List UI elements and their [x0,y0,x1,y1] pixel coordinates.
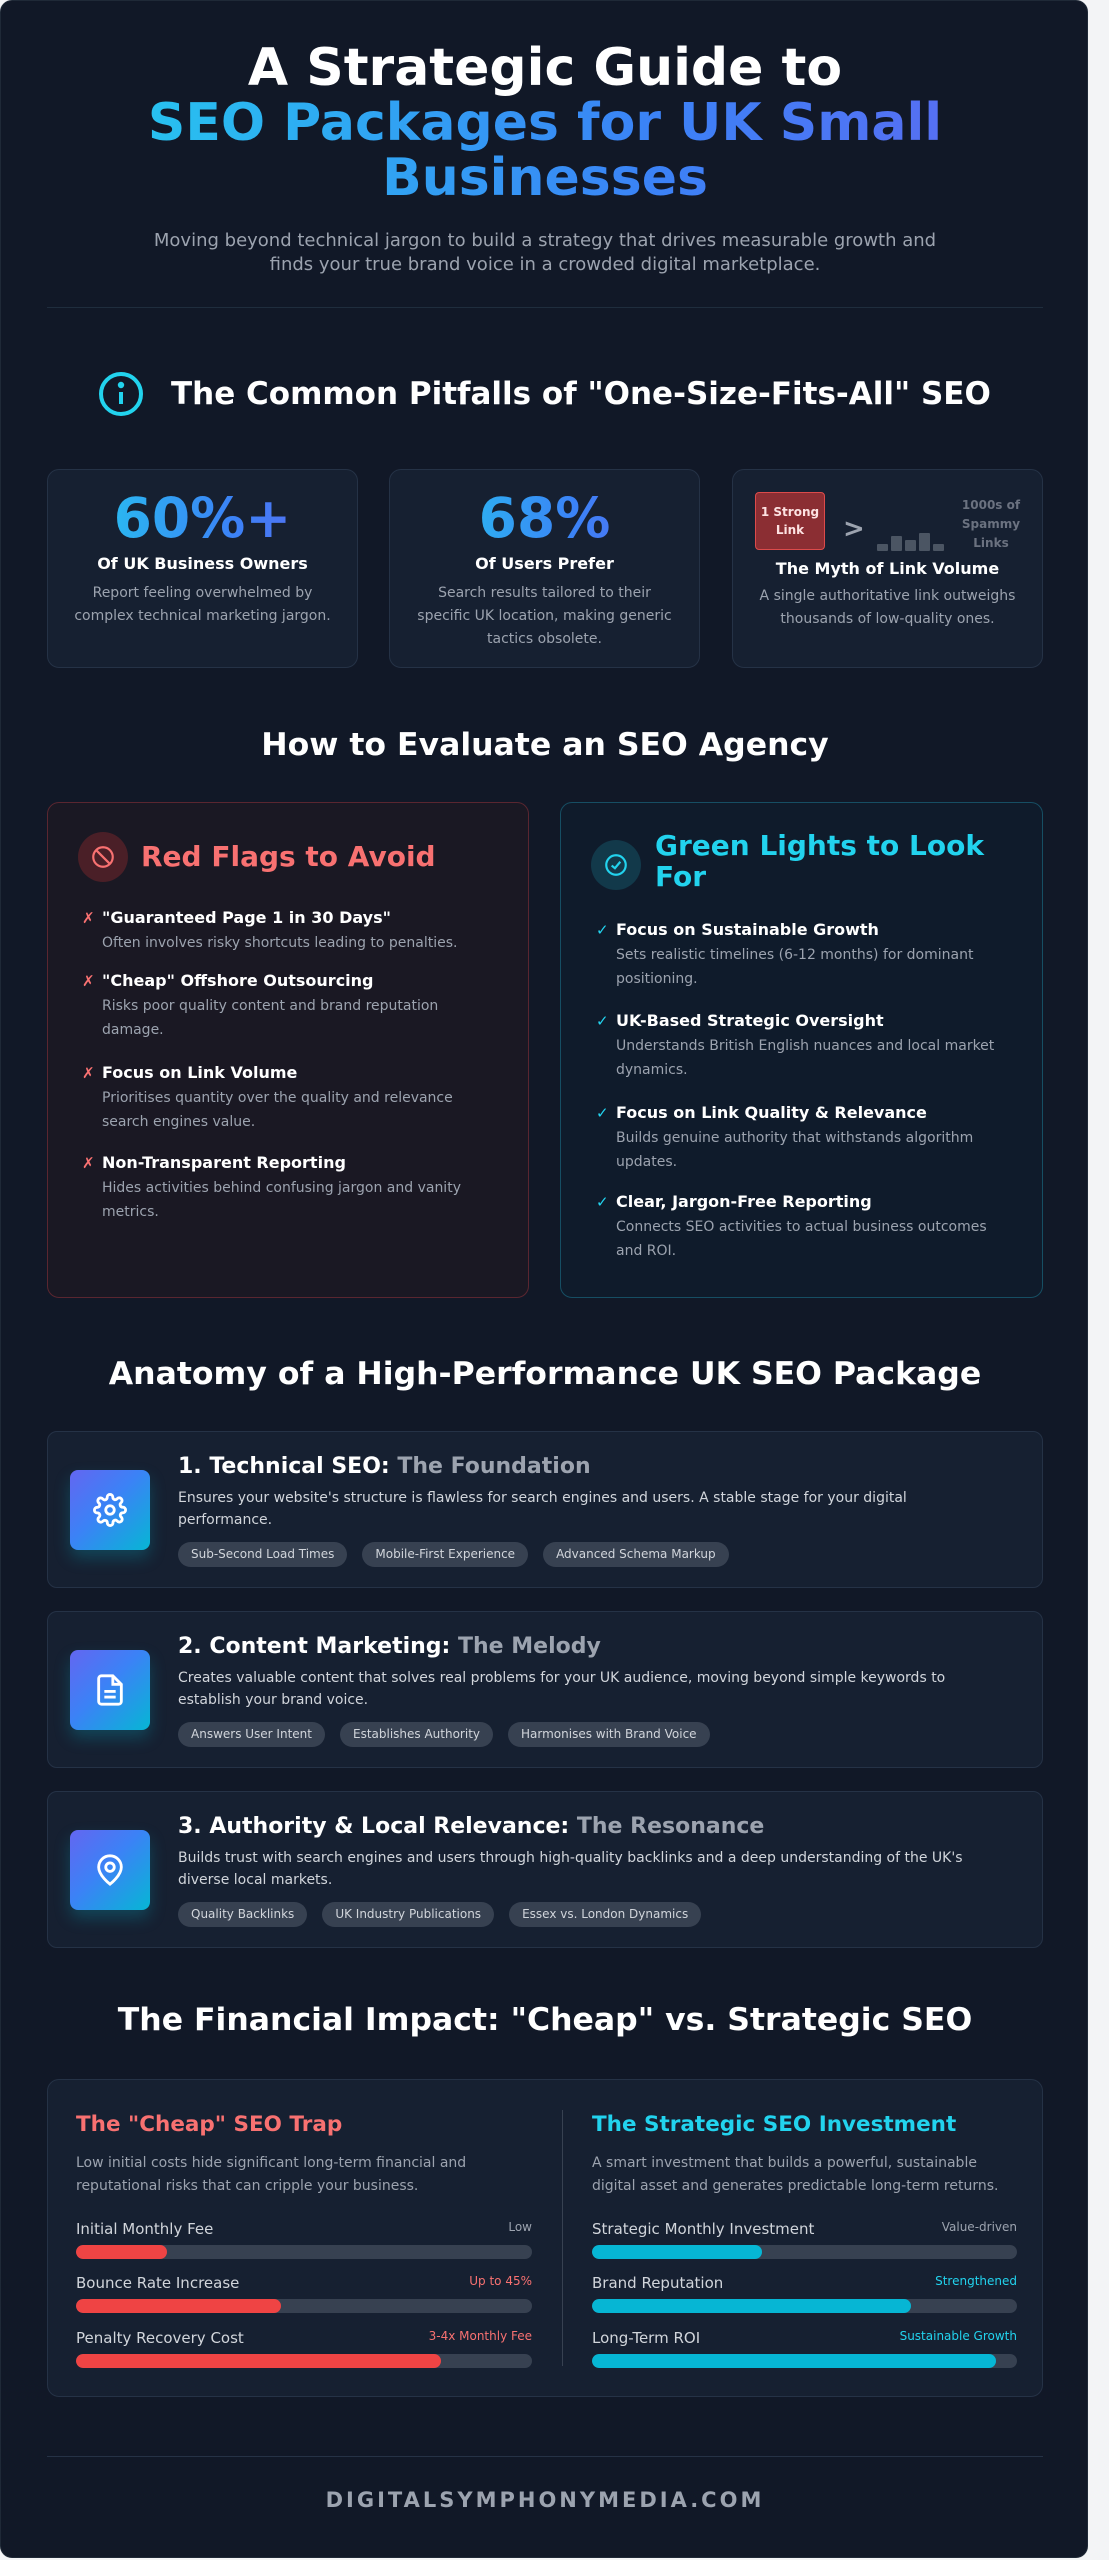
title: SEO Packages for UK Small [148,93,942,153]
stat card 3: myth of link volume: > [843,514,865,544]
package 2: content marketing: Harmonises with Brand Voice [521,1727,697,1741]
package 3: authority [47,1791,1043,1948]
heading: anatomy: Anatomy of a High-Performance UK SEO Package [109,1356,981,1392]
package 1: technical SEO: Advanced Schema Markup [556,1547,716,1561]
subtitle: Moving beyond technical jargon to build a strategy that drives measurable growth and finds your true brand voice in a crowded digital marketplace. [154,230,936,275]
panel: red flags [47,802,529,1298]
package 3: authority: UK Industry Publications [335,1907,481,1921]
package 2: content marketing: Establishes Authority [353,1727,480,1741]
strong link box [755,492,825,550]
icon: info [99,372,143,416]
column: cheap trap: Bounce Rate Increase [76,2274,239,2292]
panel: red flags: ✗ [82,1064,95,1082]
column: strategic investment: Strengthened [935,2274,1017,2288]
strong link box: Link [776,523,804,537]
package 2: content marketing: Creates valuable content that solves real problems for your UK audience, moving beyond simple keywords to establish your brand voice. [178,1670,945,1708]
column: strategic investment [592,2112,1017,2368]
spammy bars [877,533,944,551]
heading: evaluate: How to Evaluate an SEO Agency [261,727,829,763]
title: A Strategic Guide to [248,38,842,98]
panel: red flags: Focus on Link Volume [102,1063,297,1082]
icon: check circle [591,840,641,890]
panel: red flags: ✗ [82,1154,95,1172]
panel: green lights: Builds genuine authority that withstands algorithm updates. [616,1130,973,1170]
panel: green lights: ✓ [596,1193,609,1211]
icon: gear [70,1470,150,1550]
panel: green lights: Sets realistic timelines (6-12 months) for dominant positioning. [616,947,973,987]
stat card 2 [389,469,700,668]
stat card 1 [47,469,358,668]
column: cheap trap: Up to 45% [469,2274,532,2288]
panel: green lights: Connects SEO activities to actual business outcomes and ROI. [616,1219,987,1259]
stat card 3: myth of link volume: Spammy [962,517,1020,531]
column: cheap trap: 3-4x Monthly Fee [429,2329,532,2343]
strong link box: 1 Strong [761,505,819,519]
stat card 3: myth of link volume: The Myth of Link Volume [776,559,999,578]
package 2: content marketing: 2. Content Marketing: The Melody [178,1634,601,1659]
column: strategic investment: Long-Term ROI [592,2329,700,2347]
icon: ban [78,832,128,882]
package 1: technical SEO: 1. Technical SEO: The Foundation [178,1454,591,1479]
heading: pitfalls: The Common Pitfalls of "One-Size-Fits-All" SEO [171,376,991,412]
panel: red flags: Non-Transparent Reporting [102,1153,346,1172]
stat card 3: myth of link volume [732,469,1043,668]
icon: location pin [70,1830,150,1910]
package 3: authority: 3. Authority & Local Relevance: The Resonance [178,1814,764,1839]
stat card 2: Of Users Prefer [475,554,614,573]
panel: financial comparison [47,2079,1043,2397]
column: strategic investment: Brand Reputation [592,2274,723,2292]
footer: DIGITALSYMPHONYMEDIA.COM [326,2488,764,2512]
panel: green lights: Focus on Sustainable Growth [616,920,879,939]
column: strategic investment: Strategic Monthly Investment [592,2220,814,2238]
column: cheap trap [76,2112,532,2368]
panel: red flags: Red Flags to Avoid [141,840,436,873]
column: strategic investment: Sustainable Growth [900,2329,1017,2343]
column: cheap trap: Initial Monthly Fee [76,2220,213,2238]
column: cheap trap: Penalty Recovery Cost [76,2329,244,2347]
panel: green lights: Focus on Link Quality & Relevance [616,1103,927,1122]
package 3: authority: Quality Backlinks [191,1907,294,1921]
column: cheap trap: The "Cheap" SEO Trap [76,2112,342,2137]
stat card 1: Of UK Business Owners [97,554,308,573]
package 1: technical SEO: Mobile-First Experience [375,1547,515,1561]
title [148,38,942,208]
panel: green lights: Clear, Jargon-Free Reporting [616,1192,872,1211]
package 1: technical SEO: Ensures your website's structure is flawless for search engines and users. A stable stage for your digital performance. [178,1490,907,1528]
panel: red flags: ✗ [82,972,95,990]
package 3: authority: Essex vs. London Dynamics [522,1907,688,1921]
stat card 1: 60%+ [114,486,291,550]
stat card 1: Report feeling overwhelmed by complex technical marketing jargon. [74,585,331,624]
package 3: authority: Builds trust with search engines and users through high-quality backlinks and a deep understanding of the UK's diverse local markets. [178,1850,962,1888]
package 1: technical SEO: Sub-Second Load Times [191,1547,334,1561]
stat card 2: Search results tailored to their specific UK location, making generic tactics obsolete. [417,585,672,647]
panel: red flags: Prioritises quantity over the quality and relevance search engines value. [102,1090,453,1130]
column: strategic investment: The Strategic SEO Investment [592,2112,956,2137]
panel: green lights: ✓ [596,1012,609,1030]
heading: financial impact: The Financial Impact: "Cheap" vs. Strategic SEO [118,2002,972,2038]
column: strategic investment: A smart investment that builds a powerful, sustainable digital asset and generates predictable long-term returns. [592,2155,998,2194]
column: cheap trap: Low initial costs hide significant long-term financial and reputational risks that can cripple your business. [76,2155,466,2194]
panel: red flags: ✗ [82,909,95,927]
stat card 3: myth of link volume: 1000s of [962,498,1020,512]
panel: green lights: UK-Based Strategic Oversight [616,1011,884,1030]
title: Businesses [382,148,708,208]
panel: red flags: Hides activities behind confusing jargon and vanity metrics. [102,1180,461,1220]
panel: green lights: ✓ [596,1104,609,1122]
panel: green lights [560,802,1043,1298]
panel: green lights: Understands British English nuances and local market dynamics. [616,1038,994,1078]
stat card 3: myth of link volume: Links [973,536,1009,550]
column: cheap trap: Low [508,2220,532,2234]
panel: red flags: "Guaranteed Page 1 in 30 Days" [102,908,391,927]
panel: green lights: ✓ [596,921,609,939]
package 2: content marketing: Answers User Intent [191,1727,312,1741]
column: strategic investment: Value-driven [942,2220,1017,2234]
panel: red flags: Often involves risky shortcuts leading to penalties. [102,935,458,951]
icon: document [70,1650,150,1730]
package 1: technical SEO [47,1431,1043,1588]
panel: red flags: Risks poor quality content and brand reputation damage. [102,998,438,1038]
package 2: content marketing [47,1611,1043,1768]
panel: green lights: Green Lights to Look For [655,829,984,893]
stat card 3: myth of link volume: A single authoritative link outweighs thousands of low-quality ones. [760,588,1015,627]
panel: red flags: "Cheap" Offshore Outsourcing [102,971,374,990]
stat card 2: 68% [479,486,610,550]
